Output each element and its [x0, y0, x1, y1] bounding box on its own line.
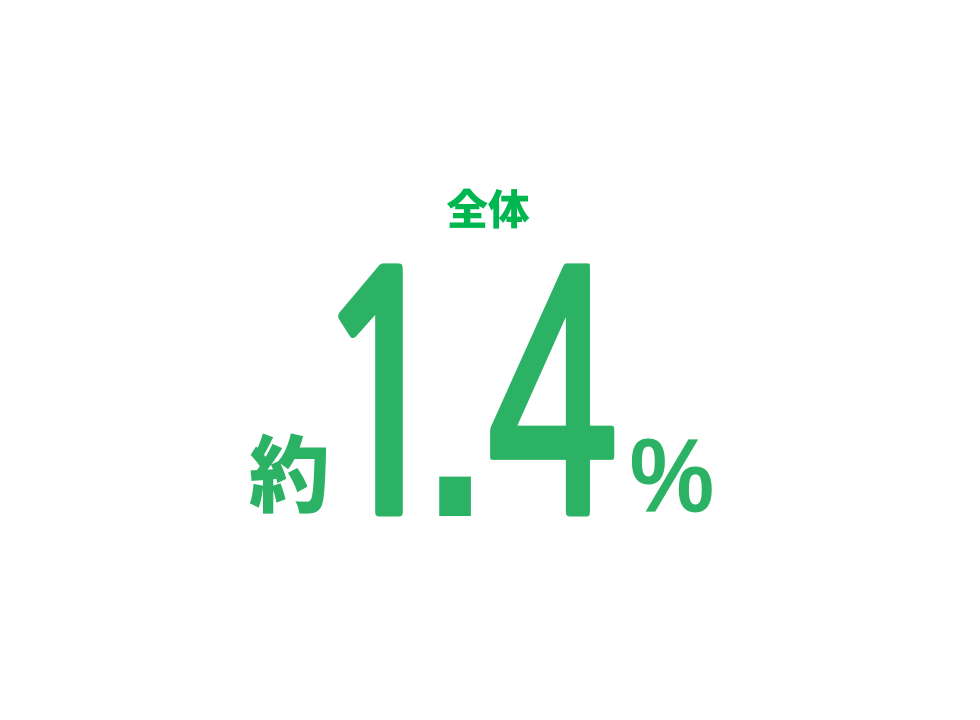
- big digit 1: 1: [305, 236, 461, 566]
- prefix: 約: 約: [249, 408, 330, 530]
- decimal point: .: [424, 277, 486, 572]
- big digit 4: 4: [484, 237, 621, 566]
- heading: 全体: 全体: [446, 176, 530, 236]
- percent sign: %: [630, 417, 714, 535]
- statistic: about 1.4%: [249, 236, 714, 572]
